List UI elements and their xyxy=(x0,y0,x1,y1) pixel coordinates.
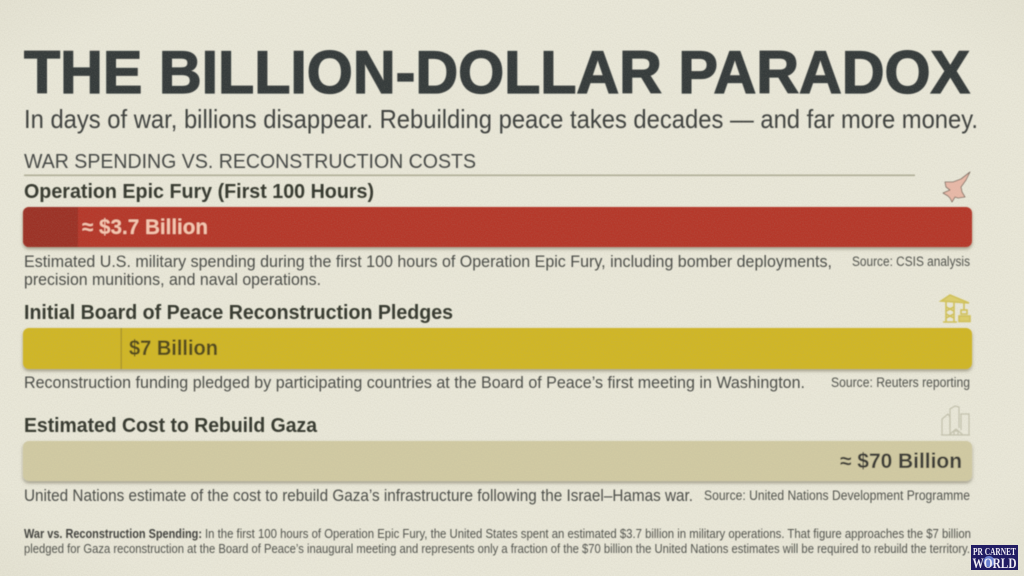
bar: $7 billion: $7 Billion xyxy=(129,337,218,360)
footnote: War vs. Reconstruction Spending: xyxy=(24,527,202,541)
panel: Cost to rebuild Gaza xyxy=(23,406,972,505)
description: Operation Epic Fury: precision munitions, and naval operations. xyxy=(24,271,321,289)
heading: Board of Peace pledges: Initial Board of Peace Reconstruction Pledges xyxy=(24,301,453,324)
description: Operation Epic Fury xyxy=(24,253,832,289)
panel: Operation Epic Fury xyxy=(23,172,972,289)
panel: Board of Peace pledges xyxy=(23,295,972,392)
bar: $7 billion xyxy=(23,328,972,369)
heading: Operation Epic Fury: Operation Epic Fury (First 100 Hours) xyxy=(24,180,374,203)
footnote xyxy=(24,527,971,556)
bar: $70 billion: ≈ $70 Billion xyxy=(840,450,962,473)
description: pledges: Reconstruction funding pledged by participating countries at the Board of Peace’s first meeting in Washington. xyxy=(24,374,805,392)
source: Reuters: Source: Reuters reporting xyxy=(831,375,970,390)
footnote: In the first 100 hours of Operation Epic Fury, the United States spent an estimated $3.7 billion in military operations. That figure approaches the $7 billion xyxy=(205,527,971,541)
bar: $70 billion xyxy=(23,441,972,481)
source: CSIS: Source: CSIS analysis xyxy=(852,254,970,269)
logo: PR Carnet World xyxy=(971,545,1018,572)
description: Gaza: United Nations estimate of the cost to rebuild Gaza’s infrastructure following the Israel–Hamas war. xyxy=(24,487,693,505)
title: THE BILLION-DOLLAR PARADOX xyxy=(24,39,970,106)
bar: $3.7 billion xyxy=(23,207,972,247)
heading: Cost to rebuild Gaza: Estimated Cost to Rebuild Gaza xyxy=(24,414,318,437)
icon: construction crane xyxy=(941,295,970,322)
bar: $3.7 billion: ≈ $3.7 Billion xyxy=(82,216,208,239)
description: Operation Epic Fury: Estimated U.S. military spending during the first 100 hours of Operation Epic Fury, including bomber deployments, xyxy=(24,253,832,271)
source: UNDP: Source: United Nations Development Programme xyxy=(704,488,970,503)
section heading: WAR SPENDING VS. RECONSTRUCTION COSTS xyxy=(24,150,476,173)
icon: fighter jet xyxy=(943,172,970,202)
icon: city buildings xyxy=(941,406,970,435)
